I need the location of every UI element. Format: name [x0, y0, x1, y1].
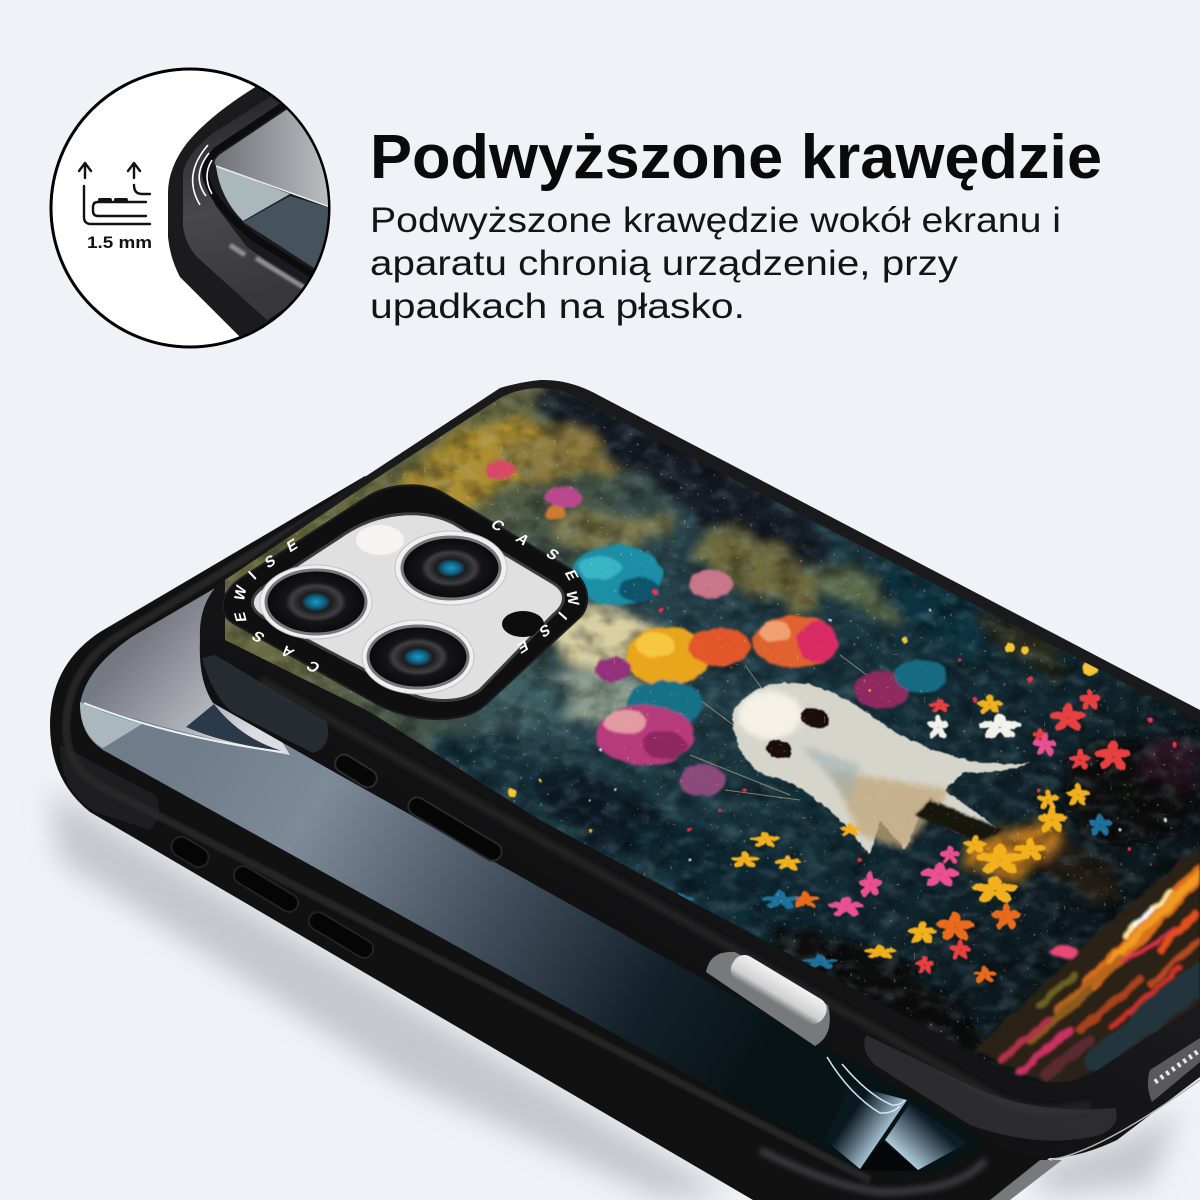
- screen dark notch: [186, 704, 282, 751]
- lower phone corner pad: [60, 745, 159, 830]
- CASEWISE ring lettering: E: [285, 535, 300, 557]
- lower phone in black case: [50, 476, 1062, 1200]
- upper mute switch: [332, 751, 380, 791]
- CASEWISE ring lettering: A: [277, 642, 298, 660]
- zoomed inner black rim: [205, 103, 318, 278]
- thickness label: 1.5 mm: [87, 234, 152, 252]
- upper speaker grille: [1148, 1038, 1200, 1102]
- lower phone case front rim: [66, 494, 870, 1180]
- screen grey wallpaper area: [84, 512, 345, 755]
- screen white arc: [84, 703, 282, 752]
- zoomed screen grey: [215, 108, 330, 207]
- description text: [370, 201, 1061, 326]
- CASEWISE ring lettering: S: [542, 546, 563, 564]
- ghost: [732, 683, 1032, 855]
- lower phone shadow: [50, 790, 730, 1198]
- upper charging port: [706, 951, 831, 1046]
- CASEWISE ring lettering: S: [249, 627, 269, 645]
- lower phone case body: [50, 476, 1060, 1200]
- camera glass plate: [252, 514, 564, 701]
- impact arcs: [193, 145, 212, 205]
- lower phone bottom rim highlight: [760, 1150, 985, 1192]
- mottled dark paint texture: [225, 388, 1198, 1061]
- upper camera-side grip pad: [202, 655, 328, 753]
- camera lens bottom: [362, 620, 474, 694]
- callout circle: raised edge detail: [51, 69, 330, 347]
- upper corner grip pad: [864, 1035, 1117, 1141]
- corner shadow at bottom right: [1040, 1110, 1180, 1195]
- CASEWISE ring lettering: C: [303, 657, 324, 675]
- mottled teal paint texture: [200, 370, 1200, 1100]
- camera ring outer: [223, 485, 587, 719]
- zoomed screen dark: [243, 196, 330, 270]
- screen blue ray left: [825, 1085, 907, 1169]
- camera island: [223, 485, 587, 719]
- upper phone in black case: [200, 380, 1200, 1160]
- screen black triangle: [860, 1141, 918, 1171]
- description text: Podwyższone krawędzie wokół ekranu i: [370, 201, 1061, 240]
- CASEWISE ring lettering: I: [555, 608, 570, 623]
- art base colour: [200, 370, 1200, 1100]
- lidar sensor: [502, 611, 544, 637]
- CASEWISE ring lettering: I: [246, 568, 260, 584]
- ghost eyes: [800, 707, 830, 730]
- lower-right glare reflection: [975, 845, 1200, 1090]
- small paint specks: [200, 370, 1200, 1100]
- CASEWISE ring lettering: S: [263, 551, 278, 573]
- flowers and paint flecks: [508, 589, 1178, 983]
- circle background: [51, 69, 329, 347]
- CASEWISE ring lettering: C: [487, 517, 508, 535]
- heading: Podwyższone krawędzie: [370, 123, 1102, 192]
- zoomed screen light line: [216, 166, 330, 207]
- zoomed side highlight: [230, 245, 305, 288]
- lower phone screen: [80, 512, 1000, 1175]
- balloon strings: [690, 654, 868, 800]
- zoomed case corner: [168, 80, 330, 340]
- upper phone side highlight: [260, 680, 1090, 1110]
- CASEWISE ring lettering: E: [231, 612, 251, 622]
- screen teal wedge: [80, 702, 142, 748]
- CASEWISE ring lettering: W: [562, 591, 582, 606]
- painted background clouds: [379, 370, 1200, 1076]
- screen curved highlights: [827, 1057, 905, 1113]
- description text: upadkach na płasko.: [370, 287, 745, 326]
- CASEWISE ring lettering: W: [232, 583, 250, 604]
- zoomed case lighter band: [183, 96, 310, 320]
- camera lens right: [395, 531, 507, 605]
- CASEWISE ring lettering: E: [560, 568, 582, 582]
- description text: aparatu chronią urządzenie, przy: [370, 244, 959, 283]
- screen blue ray right: [885, 1103, 967, 1170]
- phone case artwork: ghost and balloons: [200, 370, 1200, 1100]
- upper phone silver edge line: [1050, 1080, 1200, 1160]
- CASEWISE ring lettering: S: [537, 619, 552, 641]
- CASEWISE ring lettering: E: [515, 635, 530, 657]
- upper power button: [405, 794, 505, 864]
- camera flash: [356, 525, 404, 555]
- icon: raised edge diagram: [79, 163, 150, 224]
- CASEWISE ring lettering: [231, 517, 582, 675]
- balloons: [486, 460, 947, 796]
- camera lens left: [260, 565, 372, 639]
- lower phone side buttons: [168, 833, 376, 961]
- CASEWISE ring lettering: A: [512, 531, 533, 549]
- lower phone silver edge: [990, 1160, 1062, 1200]
- upper phone case body: [200, 380, 1200, 1158]
- zoomed screen teal: [216, 166, 290, 221]
